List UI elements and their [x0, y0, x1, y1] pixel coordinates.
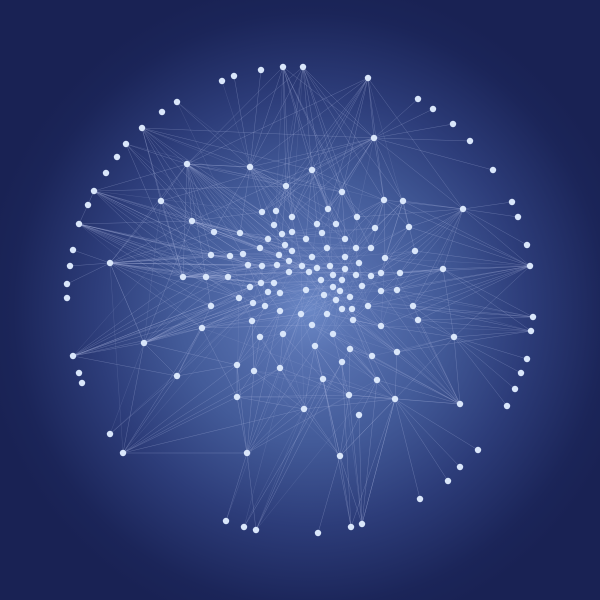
network edges	[67, 67, 533, 533]
outer ring of nodes	[64, 64, 536, 536]
intermediate ring of hub nodes	[107, 135, 466, 459]
central cluster of nodes	[189, 183, 421, 383]
